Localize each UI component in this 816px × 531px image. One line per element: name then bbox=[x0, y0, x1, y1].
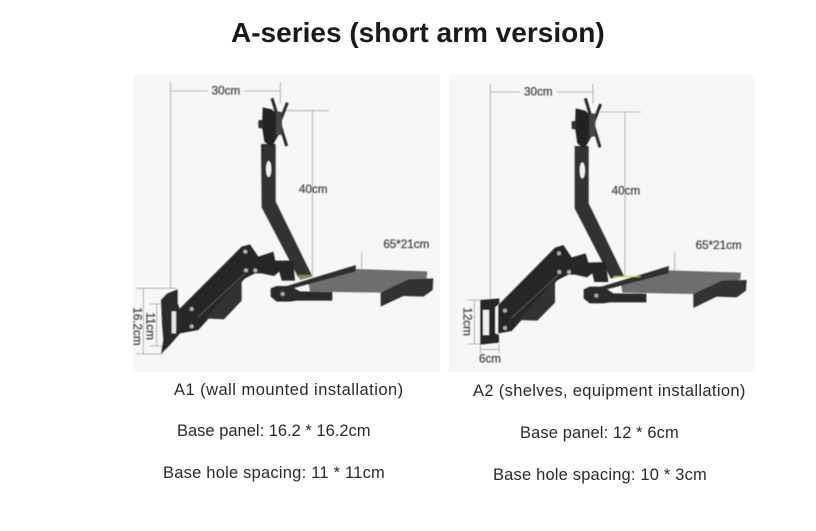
upright column bbox=[575, 146, 624, 278]
panel: A1 background bbox=[133, 75, 440, 372]
diagram: A1 wall mounted arm bbox=[130, 83, 433, 354]
labels: A1: 30cm bbox=[212, 85, 240, 98]
armrest clamp bbox=[271, 286, 332, 302]
title: A-series (short arm version) bbox=[231, 17, 605, 48]
diagram: A1 wall mounted arm: 16.2cm bbox=[130, 307, 143, 346]
diagram: A2 shelf mounted arm: 40cm bbox=[612, 184, 640, 197]
upright column bbox=[261, 144, 312, 277]
gas spring arm bbox=[498, 245, 608, 333]
keyboard tray bbox=[308, 269, 427, 293]
diagram: A1 wall mounted arm: 65*21cm bbox=[383, 238, 429, 251]
spec: A2 hole spacing: Base hole spacing: 10 * 3cm bbox=[493, 466, 707, 484]
spec: A1 base panel: Base panel: 16.2 * 16.2cm bbox=[177, 422, 371, 440]
diagram: A1 wall mounted arm: 40cm bbox=[299, 183, 328, 196]
diagram: A1 wall mounted arm: 11cm bbox=[144, 312, 157, 340]
wall plate bbox=[161, 289, 180, 354]
monitor mount bbox=[258, 98, 287, 147]
caption: A1 installation: A1 (wall mounted installation) bbox=[174, 381, 404, 399]
gas spring arm bbox=[180, 244, 295, 333]
labels: A2: 30cm bbox=[524, 86, 553, 99]
bolts bbox=[503, 251, 571, 330]
keyboard tray bbox=[621, 270, 741, 294]
spec: A1 hole spacing: Base hole spacing: 11 * 11cm bbox=[163, 464, 385, 482]
diagram: A2 shelf mounted arm: 65*21cm bbox=[696, 239, 742, 252]
caption: A2 installation: A2 (shelves, equipment installation) bbox=[473, 382, 746, 400]
armrest clamp bbox=[584, 287, 646, 303]
bolts bbox=[190, 250, 257, 328]
diagram: A2 shelf mounted arm: 6cm bbox=[479, 352, 501, 365]
dimension lines: A2 bbox=[468, 84, 675, 353]
panel: A2 background bbox=[449, 75, 755, 372]
diagram: A2 shelf mounted arm: 12cm bbox=[461, 307, 474, 336]
spec: A2 base panel: Base panel: 12 * 6cm bbox=[520, 424, 679, 442]
shelf bracket bbox=[480, 298, 499, 345]
monitor mount bbox=[572, 98, 601, 149]
diagram: A2 shelf mounted arm bbox=[461, 84, 747, 365]
dimension lines: A1 bbox=[136, 83, 362, 354]
